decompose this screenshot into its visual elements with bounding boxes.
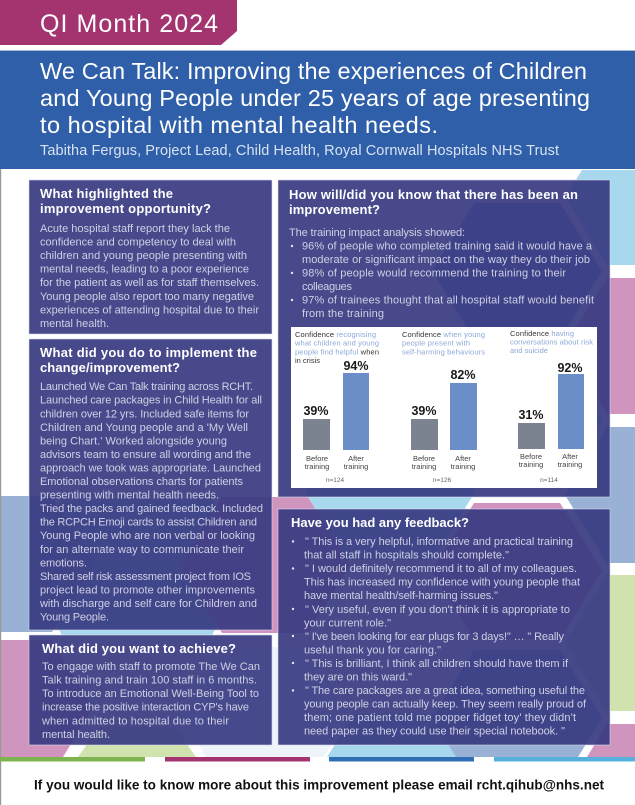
bar chart: conversations about risk and suicide: Before <box>520 452 542 461</box>
text: improvement opportunity: mental health. <box>40 318 109 330</box>
text: training impact analysis: 97% of trainees thought that all hospital staff would benefit <box>302 295 594 307</box>
bar chart: conversations about risk and suicide: 92% <box>557 361 583 375</box>
text: improvement opportunity: for the patient as well as for staff themselves. <box>40 277 259 289</box>
text: implementation: approach we took was appropriate. Launched <box>40 462 261 474</box>
text: aims: increase the positive interaction CYP's have <box>42 702 249 714</box>
text: aims: Talk training and train 100 staff in 6 months. <box>42 674 257 686</box>
chart panel: confidence before and after training <box>291 327 597 488</box>
bar chart: self-harming behaviours: training <box>412 462 436 471</box>
bar chart: conversations about risk and suicide: conversations about risk <box>510 338 593 346</box>
text: implementation: Young People who are non verbal or looking <box>40 530 255 542</box>
text: aims: when admitted to hospital due to their <box>41 715 229 727</box>
background hexagon pattern <box>0 170 635 757</box>
bar chart: self-harming behaviours: n=126 <box>433 477 452 484</box>
text: feedback quotes: need paper as they could use their special notebook. " <box>304 726 565 738</box>
title <box>40 58 590 138</box>
text: feedback quotes: useful thank you for caring." <box>304 644 441 656</box>
text: improvement opportunity: mental needs, leading to a poor experience <box>40 264 249 276</box>
bar chart: recognising what helps in crisis: n=124 <box>326 477 345 484</box>
heading: measuring improvement: improvement? <box>289 202 380 217</box>
text: feedback quotes: " I've been looking for ear plugs for 3 days!" … " Really <box>305 631 564 643</box>
text: training impact analysis: moderate or significant impact on the way they do their job <box>302 254 590 266</box>
text: training impact analysis <box>289 227 594 320</box>
bar chart: recognising what helps in crisis: Confidence recognising <box>295 330 376 339</box>
bar chart: self-harming behaviours: training <box>451 462 475 471</box>
tag: QI Month 2024: QI Month 2024 <box>40 10 218 38</box>
bar chart: self-harming behaviours: After <box>455 454 471 463</box>
text: feedback quotes: them; one patient told me popper fidget toy' they didn't <box>304 712 576 724</box>
text: feedback quotes: This has increased my confidence with young people that <box>304 577 580 589</box>
text: feedback quotes: your current role." <box>304 617 391 629</box>
bar chart: conversations about risk and suicide: training <box>519 460 543 469</box>
text: feedback quotes: they are on this ward." <box>304 672 412 684</box>
text: improvement opportunity: children and young people presenting with <box>40 250 247 262</box>
text: aims: To engage with staff to promote The We Can <box>42 661 260 673</box>
title: and Young People under 25 years of age presenting <box>40 85 590 111</box>
bar chart: self-harming behaviours: 82% <box>450 368 476 382</box>
text: improvement opportunity: Young people also report too many negative <box>40 291 254 303</box>
text: feedback quotes: that all staff in hospitals should complete." <box>304 550 509 562</box>
text: improvement opportunity: Acute hospital staff report they lack the <box>40 223 230 235</box>
panel: measuring improvement <box>278 180 610 497</box>
bar chart: recognising what helps in crisis: 94% <box>343 359 369 373</box>
bar chart: recognising what helps in crisis: 39% <box>303 404 329 418</box>
heading: improvement opportunity: What highlighted the <box>40 186 173 201</box>
bar chart: conversations about risk and suicide: 31% <box>518 408 544 422</box>
text: implementation: Launched care packages in Child Health for all <box>40 395 262 407</box>
text: training impact analysis: 96% of people who completed training said it would have a <box>302 240 593 252</box>
bar chart: recognising what helps in crisis: in crisis <box>295 356 320 365</box>
text: training impact analysis: colleagues <box>302 281 352 293</box>
bar chart: conversations about risk and suicide <box>510 329 593 484</box>
text: implementation: Launched We Can Talk training across RCHT. <box>40 381 253 393</box>
panel: feedback <box>278 509 610 745</box>
text: feedback quotes: have mental health/self-harming issues." <box>304 590 498 602</box>
text: training impact analysis: The training impact analysis showed: <box>289 227 465 239</box>
text: implementation: Children and Young people and a 'My Well <box>40 422 248 434</box>
text: implementation: emotions. <box>40 557 87 569</box>
text: implementation: advisors team to ensure all wording and the <box>40 449 251 461</box>
text: feedback quotes <box>292 536 587 738</box>
heading: improvement opportunity: improvement opportunity? <box>40 201 211 216</box>
text: implementation: being Chart.' Worked alongside young <box>40 435 227 447</box>
bar chart: recognising what helps in crisis: training <box>305 462 329 471</box>
bar chart: recognising what helps in crisis: what children and young <box>294 339 379 348</box>
text: feedback quotes: " I would definitely recommend it to all of my colleagues. <box>305 563 577 575</box>
bar chart: recognising what helps in crisis: After <box>348 454 364 463</box>
bar chart: self-harming behaviours: 39% <box>411 404 437 418</box>
bar chart: self-harming behaviours <box>402 330 485 484</box>
panel: implementation <box>29 339 272 630</box>
text: feedback quotes: " Very useful, even if you don't think it is appropriate to <box>305 604 570 616</box>
title banner <box>0 50 635 169</box>
heading: measuring improvement <box>289 187 578 217</box>
bar chart: recognising what helps in crisis: people find helpful when <box>295 347 379 356</box>
bar chart: conversations about risk and suicide: After <box>562 452 578 461</box>
bar chart: self-harming behaviours: people present with <box>402 339 470 348</box>
bar chart: recognising what helps in crisis <box>294 330 379 484</box>
text: improvement opportunity <box>40 223 259 330</box>
text: training impact analysis: from the training <box>302 308 384 320</box>
text: implementation: project lead to promote other improvements <box>40 584 256 596</box>
bar chart: conversations about risk and suicide: Confidence having <box>510 329 574 338</box>
text: aims: mental health. <box>42 729 110 741</box>
bar chart: conversations about risk and suicide: training <box>558 460 582 469</box>
text: implementation: Tried the packs and gained feedback. Included <box>40 503 263 515</box>
heading: implementation <box>40 345 257 375</box>
bar chart: self-harming behaviours: Before <box>413 454 435 463</box>
bar chart: recognising what helps in crisis: training <box>344 462 368 471</box>
heading: implementation: What did you do to implement the <box>40 345 257 360</box>
title: We Can Talk: Improving the experiences of Children <box>40 58 587 84</box>
project lead line: Tabitha Fergus, Project Lead, Child Health, Royal Cornwall Hospitals NHS Trust <box>40 143 559 159</box>
bar chart: self-harming behaviours: Confidence when young <box>402 330 485 339</box>
text: aims <box>41 661 260 741</box>
text: implementation: with discharge and self care for Children and <box>39 598 257 610</box>
text: aims: To introduce an Emotional Well-Being Tool to <box>42 688 259 700</box>
text: training impact analysis: 98% of people would recommend the training to their <box>302 268 566 280</box>
text: implementation: the RCPCH Emoji cards to assist Children and <box>40 517 257 529</box>
panel: aims <box>29 635 272 745</box>
text: implementation: Young People. <box>40 612 109 624</box>
panel: improvement opportunity <box>29 180 272 334</box>
text: feedback quotes: young people can actually keep. They seem really proud of <box>304 699 587 711</box>
text: feedback quotes: " This is a very helpful, informative and practical training <box>305 536 573 548</box>
heading: implementation: change/improvement? <box>40 360 180 375</box>
heading: measuring improvement: How will/did you know that there has been an <box>289 187 578 202</box>
bar chart: conversations about risk and suicide: and suicide <box>510 346 548 355</box>
text: implementation: Shared self risk assessment project from IOS <box>40 571 251 583</box>
text: implementation: children over 12 yrs. Included safe items for <box>40 408 249 420</box>
title: to hospital with mental health needs. <box>40 112 438 138</box>
text: implementation: for an alternate way to communicate their <box>40 544 244 556</box>
heading: aims: What did you want to achieve? <box>42 641 236 656</box>
text: implementation: Emotional observations charts for patients <box>40 476 244 488</box>
heading: feedback: Have you had any feedback? <box>291 515 469 530</box>
text: implementation: presenting with mental health needs. <box>40 490 219 502</box>
text: improvement opportunity: experiences of attending hospital due to their <box>40 304 259 316</box>
text: implementation <box>39 381 263 624</box>
text: feedback quotes: " This is brilliant, I think all children should have them if <box>305 658 569 670</box>
text: feedback quotes: " The care packages are a great idea, something useful the <box>305 685 585 697</box>
heading: improvement opportunity <box>40 186 211 216</box>
tag: QI Month 2024 <box>0 0 237 45</box>
bar chart: recognising what helps in crisis: Before <box>306 454 328 463</box>
bar chart: conversations about risk and suicide: n=114 <box>540 477 558 484</box>
footer contact line: If you would like to know more about this improvement please email rcht.qihub@nhs.net <box>34 778 604 792</box>
text: improvement opportunity: confidence and competency to deal with <box>40 236 236 248</box>
bar chart: self-harming behaviours: self-harming behaviours <box>402 347 485 356</box>
colour bars <box>0 757 635 762</box>
